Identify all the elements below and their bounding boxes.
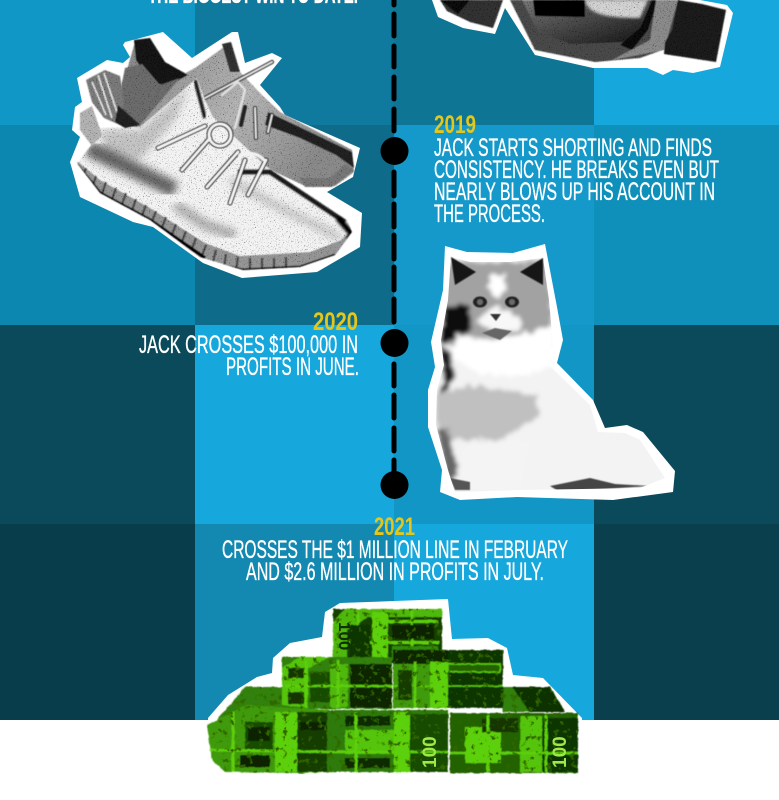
front laces [158, 124, 266, 203]
text block: 2019 [434, 111, 719, 228]
grey side band [612, 0, 678, 60]
description 2019 [434, 134, 719, 228]
description 2021 [222, 536, 568, 586]
brick middle right [393, 650, 503, 708]
sticker outline [70, 32, 362, 278]
brick middle left [282, 657, 392, 709]
description 2020: PROFITS IN JUNE. [226, 353, 359, 381]
icon: sneakers [70, 32, 362, 278]
bill denomination labels: 100 [550, 736, 571, 768]
description 2019: THE PROCESS. [434, 200, 545, 228]
icon: cat [425, 244, 675, 500]
description 2021: CROSSES THE $1 MILLION LINE IN FEBRUARY [222, 536, 568, 564]
bill denomination labels: 100 [335, 622, 354, 650]
description 2020 [139, 331, 359, 381]
dot 2020 [380, 329, 408, 357]
nose [490, 314, 501, 321]
year 2020: 2020 [313, 308, 358, 336]
text block: 2020 [139, 308, 359, 381]
left strap [440, 0, 503, 28]
bill denomination labels: 100 [420, 736, 441, 768]
bill denomination labels [335, 622, 571, 768]
back row [215, 687, 565, 722]
sticker outline [428, 244, 675, 500]
front shoe body [76, 78, 352, 272]
icon: money stacks [207, 599, 582, 773]
brick bottom middle [327, 710, 448, 772]
icon: goggles [432, 0, 733, 75]
year 2021: 2021 [374, 513, 415, 541]
year 2019: 2019 [434, 111, 476, 139]
ears [451, 257, 476, 285]
carbon frame [510, 0, 680, 62]
front heel collar [80, 70, 140, 146]
sole [76, 160, 352, 272]
brick bottom right [450, 713, 578, 773]
sticker outline [208, 599, 582, 725]
brick bottom left [207, 705, 330, 773]
description 2021: AND $2.6 MILLION IN PROFITS IN JULY. [246, 558, 544, 586]
dot 2019 [380, 137, 408, 165]
dot 2021 [380, 471, 408, 499]
back laces [205, 62, 272, 138]
eyes [473, 296, 519, 308]
timeline dashed line and dots [380, 0, 408, 499]
text block: 2021 [222, 513, 568, 586]
description 2020: JACK CROSSES $100,000 IN [139, 331, 358, 359]
lens interior [522, 0, 650, 44]
back shoe [115, 38, 354, 187]
fur [436, 257, 664, 492]
right strap [664, 0, 726, 62]
brick top [333, 609, 442, 663]
